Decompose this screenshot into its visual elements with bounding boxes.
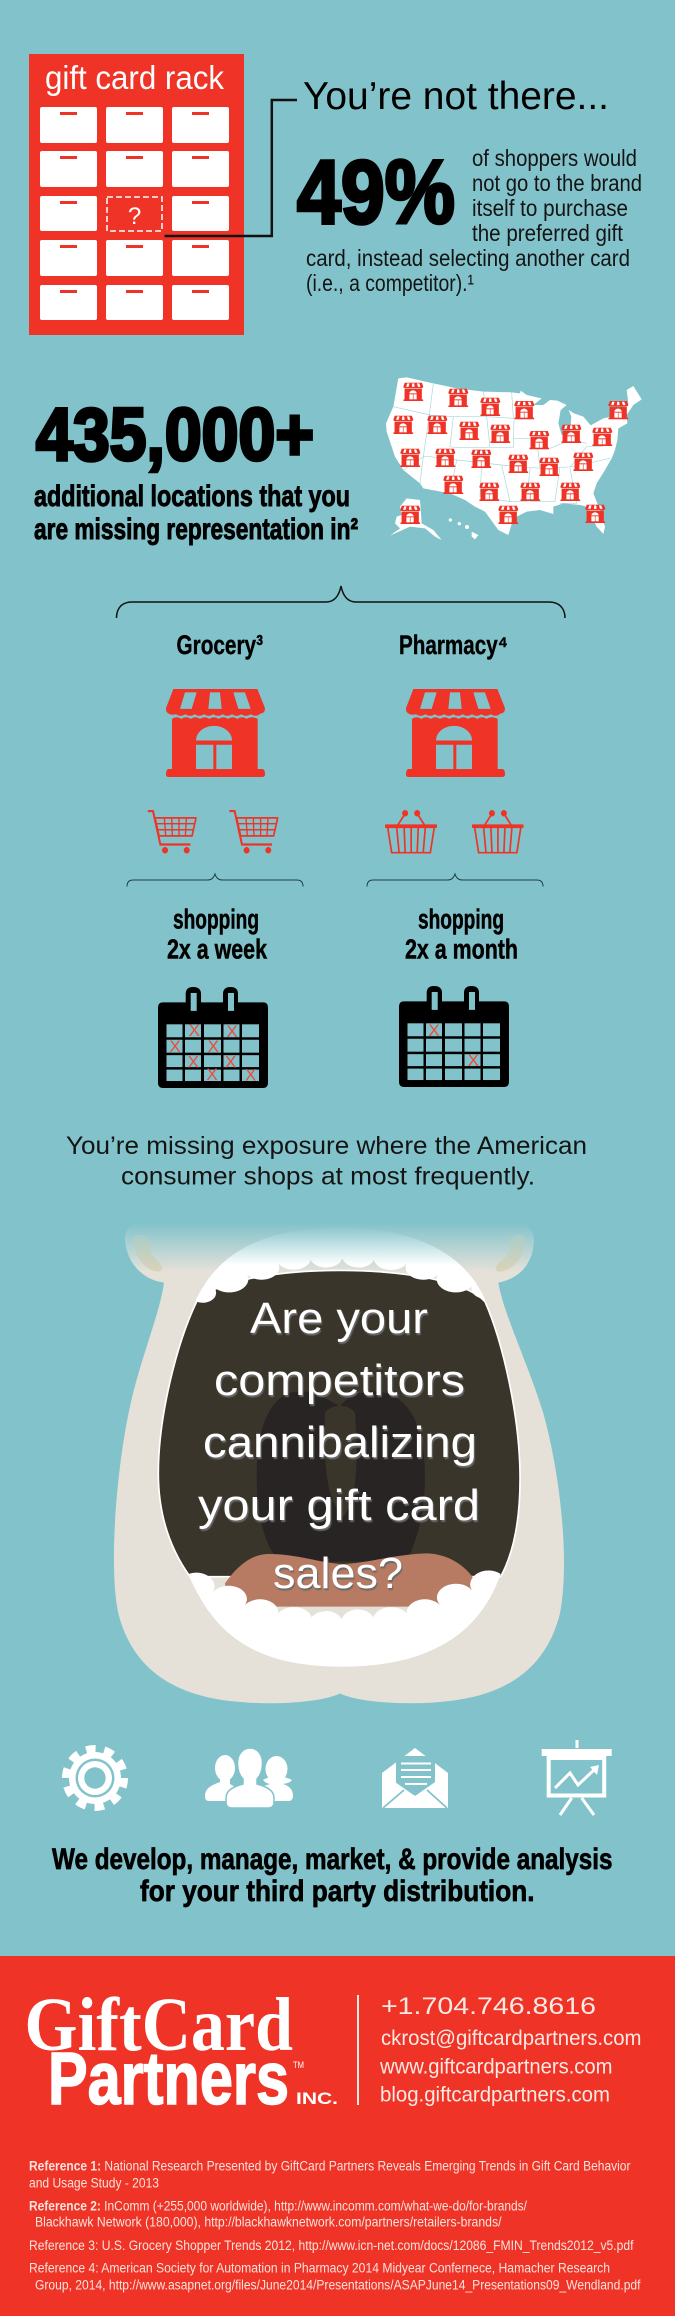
contact details: blog.giftcardpartners.com xyxy=(380,2084,610,2106)
connector arrow xyxy=(164,100,297,236)
rack title: gift card rack xyxy=(45,59,224,96)
text block: additional locations: additional locations that you xyxy=(34,480,350,513)
map: United States with store markers xyxy=(386,377,642,540)
icon: calendar with eight marks: X xyxy=(245,1066,256,1084)
map state lines xyxy=(393,383,610,503)
heading: you're not there: You’re not there... xyxy=(303,75,609,118)
logo: GiftCard Partners: INC. xyxy=(296,2089,338,2108)
text: missing exposure statement: You’re missing exposure where the American xyxy=(66,1132,587,1160)
logo: GiftCard Partners: GiftCard xyxy=(24,1983,293,2067)
text: are your competitors cannibalizing your gift card sales: Are your xyxy=(250,1294,428,1343)
illustration: open mouth xyxy=(114,1223,564,1703)
text: we develop, manage, market: for your third party distribution. xyxy=(140,1875,534,1908)
logo: GiftCard Partners xyxy=(24,1983,338,2120)
text block: additional locations xyxy=(34,480,358,546)
text block: additional locations: are missing representation in² xyxy=(34,513,358,546)
text: are your competitors cannibalizing your gift card sales: sales? xyxy=(273,1549,403,1598)
references xyxy=(29,2158,641,2292)
small brace: grocery xyxy=(127,874,303,886)
small brace: pharmacy xyxy=(367,874,543,886)
face xyxy=(114,1223,564,1703)
icon: calendar with eight marks: X xyxy=(206,1065,218,1084)
text: shopping 2x a week xyxy=(167,904,267,964)
label: pharmacy: Pharmacy⁴ xyxy=(399,630,508,660)
icon: calendar with two marks: X xyxy=(468,1051,479,1070)
logo: GiftCard Partners: TM xyxy=(293,2060,304,2070)
icon: gear xyxy=(66,1749,124,1807)
text block: 49 percent explanation: the preferred gift xyxy=(472,220,624,246)
icons: shopping baskets xyxy=(385,810,524,853)
panel: footer xyxy=(0,1956,675,2316)
stat: 49 percent: 49% xyxy=(297,143,455,243)
icon: presentation board with chart xyxy=(542,1740,612,1815)
text block: 49 percent explanation: card, instead selecting another card xyxy=(306,245,630,271)
text: are your competitors cannibalizing your gift card sales: cannibalizing xyxy=(203,1418,477,1467)
stat: 435,000+: 435,000+ xyxy=(36,393,314,476)
text: shopping 2x a week: 2x a week xyxy=(167,934,267,964)
text block: 49 percent explanation: not go to the brand xyxy=(472,170,642,196)
panel: gift card rack xyxy=(29,54,244,335)
text: missing exposure statement: consumer shops at most frequently. xyxy=(121,1162,535,1190)
label: grocery: Grocery³ xyxy=(176,630,263,660)
icon: calendar with eight marks: X xyxy=(208,1037,219,1056)
uvula xyxy=(325,1406,356,1517)
rack cards xyxy=(40,107,229,320)
big brace xyxy=(116,586,565,618)
map land xyxy=(386,377,642,540)
icon: calendar with eight marks: X xyxy=(189,1021,200,1040)
missing card with question mark xyxy=(107,197,162,231)
contact details: www.giftcardpartners.com xyxy=(379,2056,612,2078)
icon: open envelope with letter xyxy=(382,1748,448,1808)
text: missing exposure statement xyxy=(66,1132,587,1190)
references: Blackhawk Network (180,000), http://blackhawknetwork.com/partners/retailers-brands/ xyxy=(35,2214,502,2230)
text: shopping 2x a month xyxy=(405,904,518,964)
logo: GiftCard Partners: Partners xyxy=(48,2037,289,2120)
throat xyxy=(257,1391,425,1562)
references: and Usage Study - 2013 xyxy=(29,2176,159,2190)
references: Reference 2: InComm (+255,000 worldwide), http://www.incomm.com/what-we-do/for-brands/ xyxy=(29,2198,527,2214)
mouth cavity xyxy=(158,1270,520,1577)
contact details: ckrost@giftcardpartners.com xyxy=(381,2027,642,2050)
contact details xyxy=(379,1993,642,2106)
icon: calendar with two marks: X xyxy=(428,1021,440,1040)
icon: calendar with eight marks: X xyxy=(225,1052,236,1072)
icons: shopping carts xyxy=(148,811,278,854)
ears xyxy=(133,1235,525,1272)
text block: 49 percent explanation xyxy=(306,145,642,296)
text block: 49 percent explanation: itself to purchase xyxy=(472,195,628,221)
lower teeth xyxy=(188,1570,501,1667)
upper teeth xyxy=(195,1227,486,1303)
contact details: +1.704.746.8616 xyxy=(381,1993,596,2020)
tongue xyxy=(225,1553,477,1607)
icon: pharmacy store xyxy=(406,689,505,777)
text block: 49 percent explanation: of shoppers would xyxy=(472,145,637,171)
icon: calendar with eight marks: X xyxy=(188,1052,199,1072)
missing card with question mark: ? xyxy=(128,203,141,230)
icon: calendar with eight marks: X xyxy=(169,1037,181,1056)
text: shopping 2x a week: shopping xyxy=(173,904,259,934)
icon: grocery store xyxy=(166,689,265,777)
text: are your competitors cannibalizing your gift card sales: your gift card xyxy=(198,1481,480,1530)
references: Reference 4: American Society for Automation in Pharmacy 2014 Midyear Confernece, Hamacher Research xyxy=(29,2260,610,2276)
store markers xyxy=(393,383,628,524)
icon: people xyxy=(205,1748,293,1808)
icon: calendar with two marks xyxy=(399,986,509,1087)
icon: calendar with eight marks: X xyxy=(226,1022,238,1041)
text: are your competitors cannibalizing your gift card sales xyxy=(198,1294,480,1598)
icon: calendar with eight marks xyxy=(158,987,268,1088)
text: shopping 2x a month: 2x a month xyxy=(405,934,518,964)
text: are your competitors cannibalizing your gift card sales: competitors xyxy=(214,1356,465,1405)
text: we develop, manage, market xyxy=(52,1843,612,1908)
text: shopping 2x a month: shopping xyxy=(418,904,504,934)
text block: 49 percent explanation: (i.e., a competitor).¹ xyxy=(306,270,474,296)
